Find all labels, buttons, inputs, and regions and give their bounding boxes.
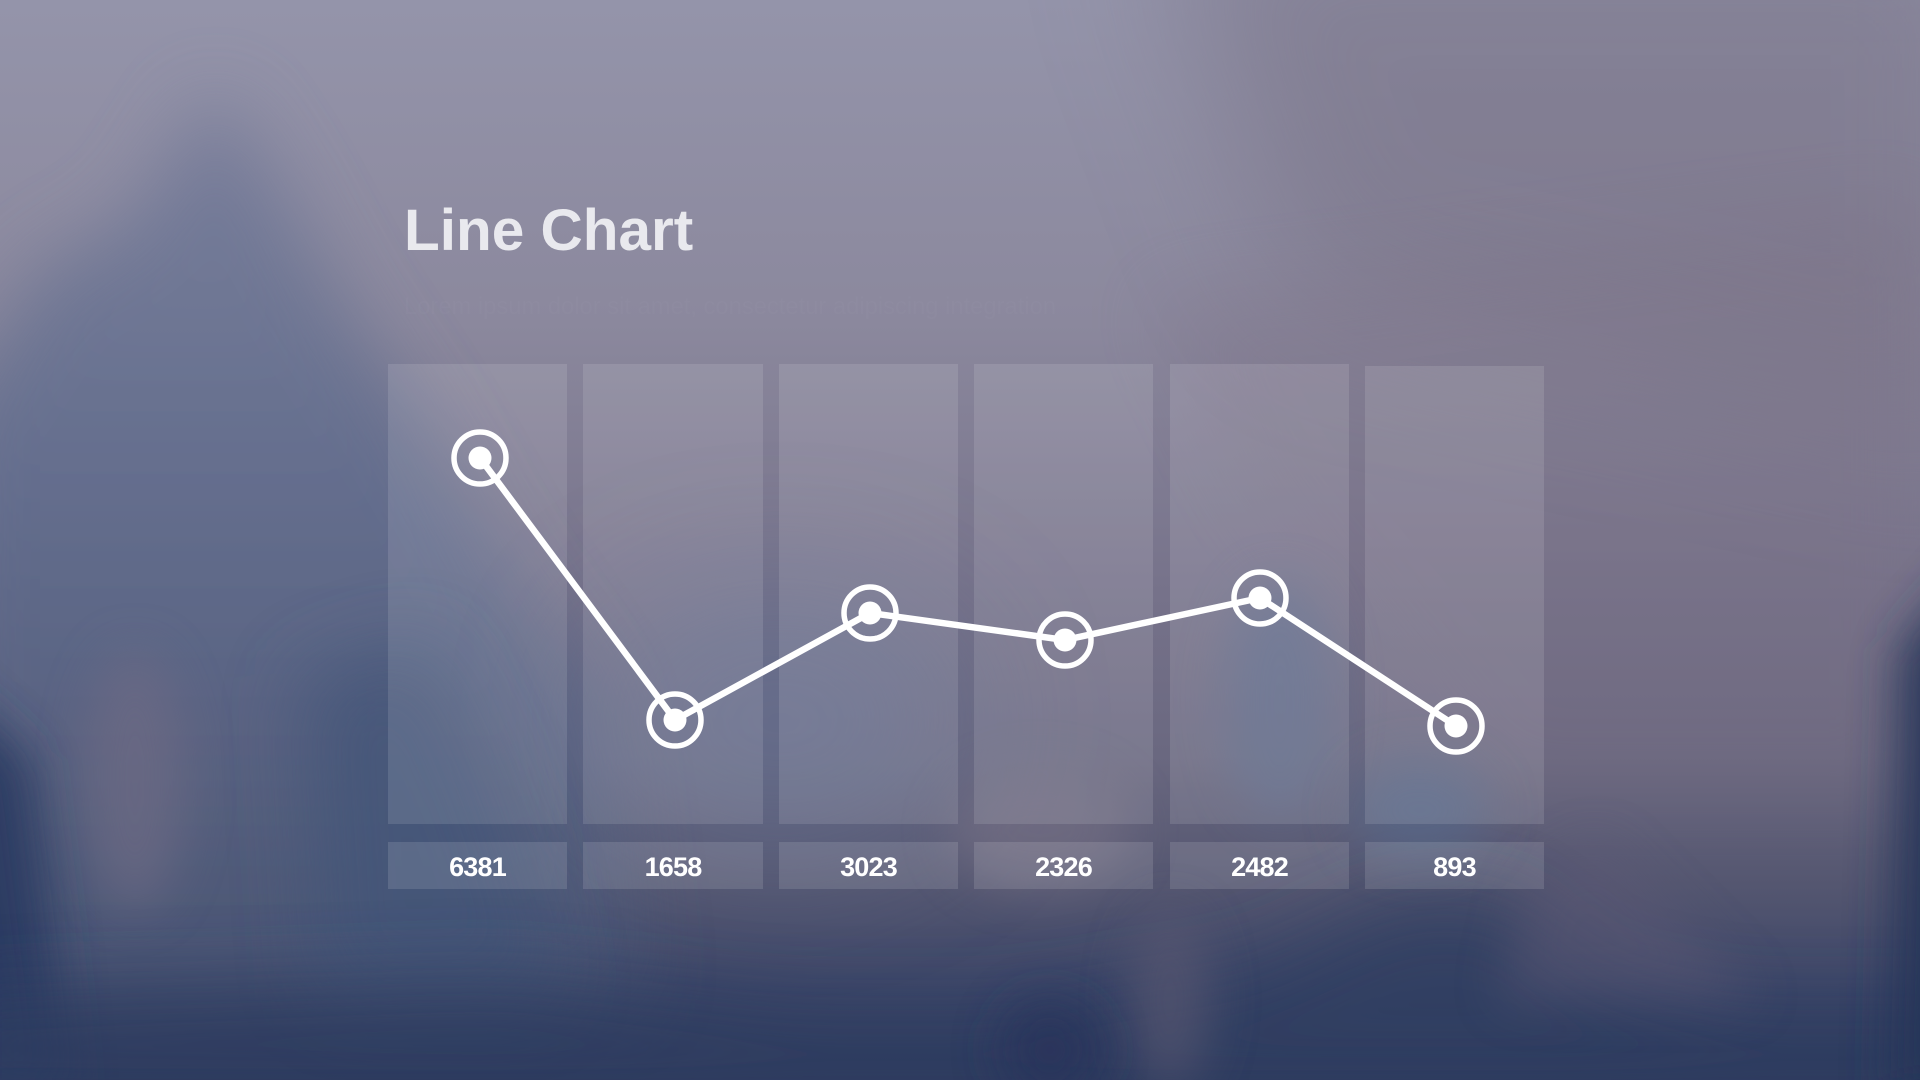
value labels: 1658 xyxy=(645,852,702,882)
value labels: 6381 xyxy=(449,852,507,882)
value boxes xyxy=(388,842,1544,889)
value labels: 2326 xyxy=(1035,852,1093,882)
subtitle: faint, barely legible: Lorem ipsum dolor sit amet, consectetur adipiscing integration xyxy=(404,293,1056,320)
value labels: 893 xyxy=(1433,852,1477,882)
column panels xyxy=(388,364,1544,824)
data point markers xyxy=(454,432,1482,752)
chart: columns and values xyxy=(388,364,1544,889)
value labels xyxy=(449,852,1477,882)
title: Line Chart xyxy=(404,198,693,263)
line series xyxy=(480,458,1456,726)
value labels: 3023 xyxy=(840,852,898,882)
value labels: 2482 xyxy=(1231,852,1288,882)
